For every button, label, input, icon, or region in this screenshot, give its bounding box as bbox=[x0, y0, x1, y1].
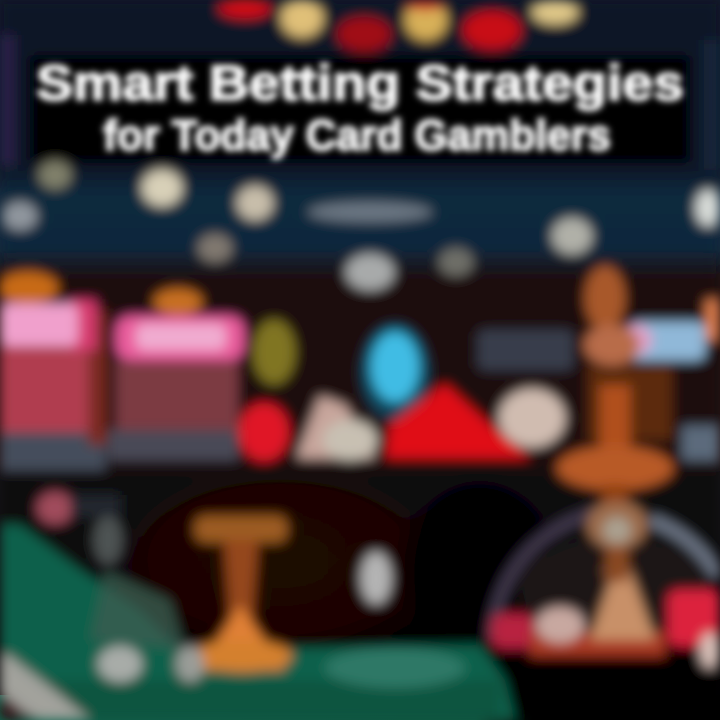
chips on table bbox=[98, 646, 204, 682]
chart-like roulette wheel bbox=[492, 501, 720, 668]
red and white card pile bbox=[239, 384, 565, 461]
title: for Today Card Gamblers bbox=[103, 111, 611, 160]
icon: left pedestal trophy bbox=[192, 516, 292, 672]
icon: blue gem bbox=[361, 324, 429, 420]
small dots row bbox=[3, 161, 720, 290]
icon: left gaming chips bbox=[37, 492, 122, 564]
dark screen bbox=[478, 330, 573, 370]
title bbox=[36, 55, 684, 160]
panel: second slot machine bbox=[108, 289, 244, 460]
title: Smart Betting Strategies bbox=[36, 55, 684, 111]
right slot machine bbox=[620, 300, 720, 460]
title backdrop bbox=[30, 55, 690, 163]
icon: centre white pawn bbox=[361, 552, 391, 604]
icon: yellow lamp bbox=[253, 320, 295, 384]
panel: green felt table bbox=[0, 525, 515, 720]
top ornaments: card suit chips bbox=[219, 0, 578, 51]
trophy: right tall pedestal bbox=[557, 266, 673, 513]
panel: left slot machine bbox=[0, 272, 106, 470]
